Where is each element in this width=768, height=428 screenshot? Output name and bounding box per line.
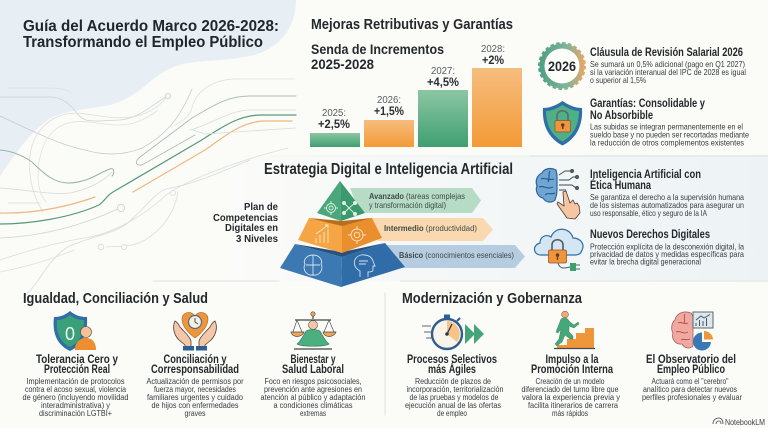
text: observatorio: analítico para detectar nuevos [643, 384, 737, 394]
text: procesos selectivos: incorporación, territorialización [406, 384, 504, 394]
icon: shield with padlock [543, 101, 582, 146]
text: procesos selectivos: Procesos Selectivos [407, 354, 497, 366]
text: promoción interna: Impulso a la [546, 354, 599, 366]
chart heading: Senda de Incrementos [311, 42, 444, 57]
icon: stopwatch and arrows [422, 314, 484, 349]
text: nuevos derechos: Nuevos Derechos Digitales [590, 229, 710, 241]
text: tolerancia cero: interadministrativa) y [41, 400, 111, 410]
text: promoción interna: diferenciado del turno libre que [522, 384, 619, 394]
text: cláusula: o superior al 1,5% [590, 76, 646, 85]
title: Guía del Acuerdo Marco 2026-2028: [23, 18, 279, 35]
chart heading: 2025-2028 [311, 57, 374, 72]
text: bienestar: extremas [300, 408, 326, 418]
heading: modernización: Modernización y Gobernanza [402, 291, 583, 307]
text: inteligencia artificial: Ética Humana [590, 179, 651, 192]
text: procesos selectivos: de empleo [437, 408, 467, 418]
icon: person climbing stairs [554, 311, 595, 348]
text: procesos selectivos: más Ágiles [428, 363, 476, 376]
text: nuevos derechos [590, 229, 744, 266]
text: procesos selectivos: Reducción de plazos de [415, 376, 491, 386]
arrow: básico: Básico (conocimientos esenciales) [399, 250, 514, 260]
text: promoción interna: Creación de un modelo [536, 376, 605, 386]
text: bienestar [260, 354, 366, 418]
text: conciliación: graves [184, 408, 206, 418]
text: tolerancia cero [22, 354, 129, 418]
arrow: intermedio [365, 218, 493, 241]
text: promoción interna: facilita itinerarios de carrera [528, 400, 618, 410]
tier: básico [280, 243, 405, 287]
bar 2028: 2028: [481, 44, 505, 55]
text: tolerancia cero: Protección Real [44, 364, 110, 376]
text: garantías: No Absorbible [590, 110, 653, 122]
text: promoción interna: Promoción Interna [531, 364, 613, 376]
text: cláusula: si la variación interanual del IPC de 2028 es igual [590, 68, 746, 77]
text: promoción interna [522, 354, 621, 418]
text: garantías: sueldo base y no pueden ser recortadas mediante [590, 130, 749, 140]
icon: meditating person and scale [291, 312, 336, 349]
bar 2027 [418, 66, 468, 147]
icon: brain chart and pie [672, 312, 713, 350]
text: conciliación: fuerza mayor, necesidades [154, 384, 236, 394]
heading: estrategia digital: Estrategia Digital e Inteligencia Artificial [264, 161, 513, 178]
chart heading [311, 42, 444, 72]
text: tolerancia cero: contra el acoso sexual, violencia [25, 384, 126, 394]
text: bienestar: Bienestar y [290, 354, 336, 366]
bar 2026 [364, 95, 414, 147]
panel: nuevos derechos digitales [534, 229, 744, 271]
bar chart: senda de incrementos [310, 42, 522, 147]
bar 2025: 2025: [322, 108, 346, 119]
label: plan de competencias: Digitales en [225, 223, 278, 234]
arrow: avanzado: y transformación digital) [369, 200, 446, 210]
icon: brain and hand [536, 169, 580, 219]
text: bienestar: Salud Laboral [282, 364, 344, 376]
card: observatorio [642, 312, 742, 402]
text: bienestar: atención al público y adaptación [260, 392, 366, 402]
text: tolerancia cero: discriminación LGTBI+ [39, 408, 112, 418]
title: Transformando el Empleo Público [23, 34, 263, 51]
bar 2028: +2% [482, 55, 504, 67]
card: bienestar [260, 312, 366, 418]
text: inteligencia artificial: de los sistemas automatizados para asegurar un [590, 201, 744, 210]
text: promoción interna: valora la experiencia previa y [522, 392, 621, 402]
text: bienestar: a condiciones climáticas [274, 400, 352, 410]
icon: 2026 seal [539, 43, 585, 89]
heading: igualdad: Igualdad, Conciliación y Salud [23, 291, 208, 307]
label: plan de competencias [213, 202, 279, 245]
bar 2027: +4,5% [427, 77, 459, 89]
bar 2028 [472, 44, 522, 147]
text: cláusula [590, 47, 746, 85]
text: nuevos derechos: Protección explícita de la desconexión digital, la [590, 242, 744, 252]
card: conciliación [146, 312, 244, 418]
arrow: avanzado [350, 188, 481, 213]
panel: cláusula de revisión [539, 43, 746, 89]
text: observatorio [642, 354, 742, 402]
card: tolerancia cero [22, 311, 129, 418]
label: plan de competencias: Competencias [213, 213, 279, 224]
tier: intermedio [298, 218, 382, 253]
text: conciliación: Corresponsabilidad [151, 364, 239, 376]
text: garantías: Las subidas se integran permanentemente en el [590, 122, 743, 132]
decorative circuit lines [0, 79, 768, 415]
bar 2025: +2,5% [318, 119, 350, 131]
text: cláusula: Se sumará un 0,5% adicional (pago en Q1 2027) [590, 60, 745, 69]
bar 2026: 2026: [377, 95, 401, 106]
text: inteligencia artificial: Inteligencia Artificial con [590, 169, 701, 181]
text: conciliación: Actualización de permisos por [146, 376, 244, 386]
card: procesos selectivos [405, 314, 504, 418]
bar 2026: +1,5% [374, 106, 404, 118]
icon: 2026 seal: 2026 [548, 58, 576, 74]
background blue blob [0, 0, 296, 176]
pyramid chart [280, 181, 525, 287]
card: promoción interna [522, 311, 621, 418]
text: procesos selectivos: de las pruebas y modelos de [410, 392, 499, 402]
text: observatorio: El Observatorio del [646, 354, 736, 366]
text: conciliación: Conciliación y [164, 354, 227, 366]
tier: avanzado [317, 181, 365, 221]
icon: cloud with padlock and plug [534, 229, 583, 271]
text: conciliación: familiares urgentes y cuidado [147, 392, 243, 402]
text: observatorio: Empleo Público [657, 364, 725, 376]
title [23, 18, 279, 51]
icon: shield zero and person: 0 [65, 324, 75, 344]
digital strategy band [230, 155, 768, 281]
text: observatorio: Actuará como el "cerebro" [652, 376, 728, 386]
text: inteligencia artificial [590, 169, 744, 218]
text: procesos selectivos: ejecución anual de las ofertas [405, 400, 501, 410]
panel: inteligencia artificial con ética humana [536, 169, 744, 219]
text: tolerancia cero: Implementación de protocolos [26, 376, 124, 386]
text: conciliación [146, 354, 244, 418]
text: conciliación: de hijos con enfermedades [152, 400, 238, 410]
arrow: básico [380, 245, 525, 268]
text: inteligencia artificial: Se garantiza el derecho a la supervisión humana [590, 193, 744, 202]
text: inteligencia artificial: uso responsable, ético y seguro de la IA [590, 209, 707, 218]
heading: mejoras retributivas: Mejoras Retributivas y Garantías [311, 17, 513, 33]
panel: garantías [543, 98, 749, 148]
text: bienestar: prevención ante agresiones en [264, 384, 362, 394]
text: garantías: la reducción de otros complementos existentes [590, 138, 744, 148]
text: nuevos derechos: evitar la brecha digital generacional [590, 258, 701, 266]
label: plan de competencias: 3 Niveles [236, 234, 279, 245]
text: tolerancia cero: de género (incluyendo movilidad [22, 392, 129, 402]
text: garantías: Garantías: Consolidable y [590, 98, 705, 110]
arrow: avanzado: Avanzado (tareas complejas [369, 191, 465, 201]
text: nuevos derechos: privacidad de datos y medidas específicas para [590, 250, 744, 259]
text: promoción interna: más rápidos [552, 408, 588, 418]
text: procesos selectivos [405, 354, 504, 418]
label: plan de competencias: Plan de [244, 202, 279, 213]
text: garantías [590, 98, 749, 148]
text: bienestar: Foco en riesgos psicosociales, [264, 376, 362, 386]
text: tolerancia cero: Tolerancia Cero y [36, 354, 119, 366]
bar 2025 [310, 108, 360, 147]
arrow: intermedio: Intermedio (productividad) [384, 223, 477, 233]
bar 2027: 2027: [431, 66, 455, 77]
icon: hands holding heart with clock [174, 312, 216, 350]
text: observatorio: perfiles profesionales y evaluar [642, 392, 742, 402]
